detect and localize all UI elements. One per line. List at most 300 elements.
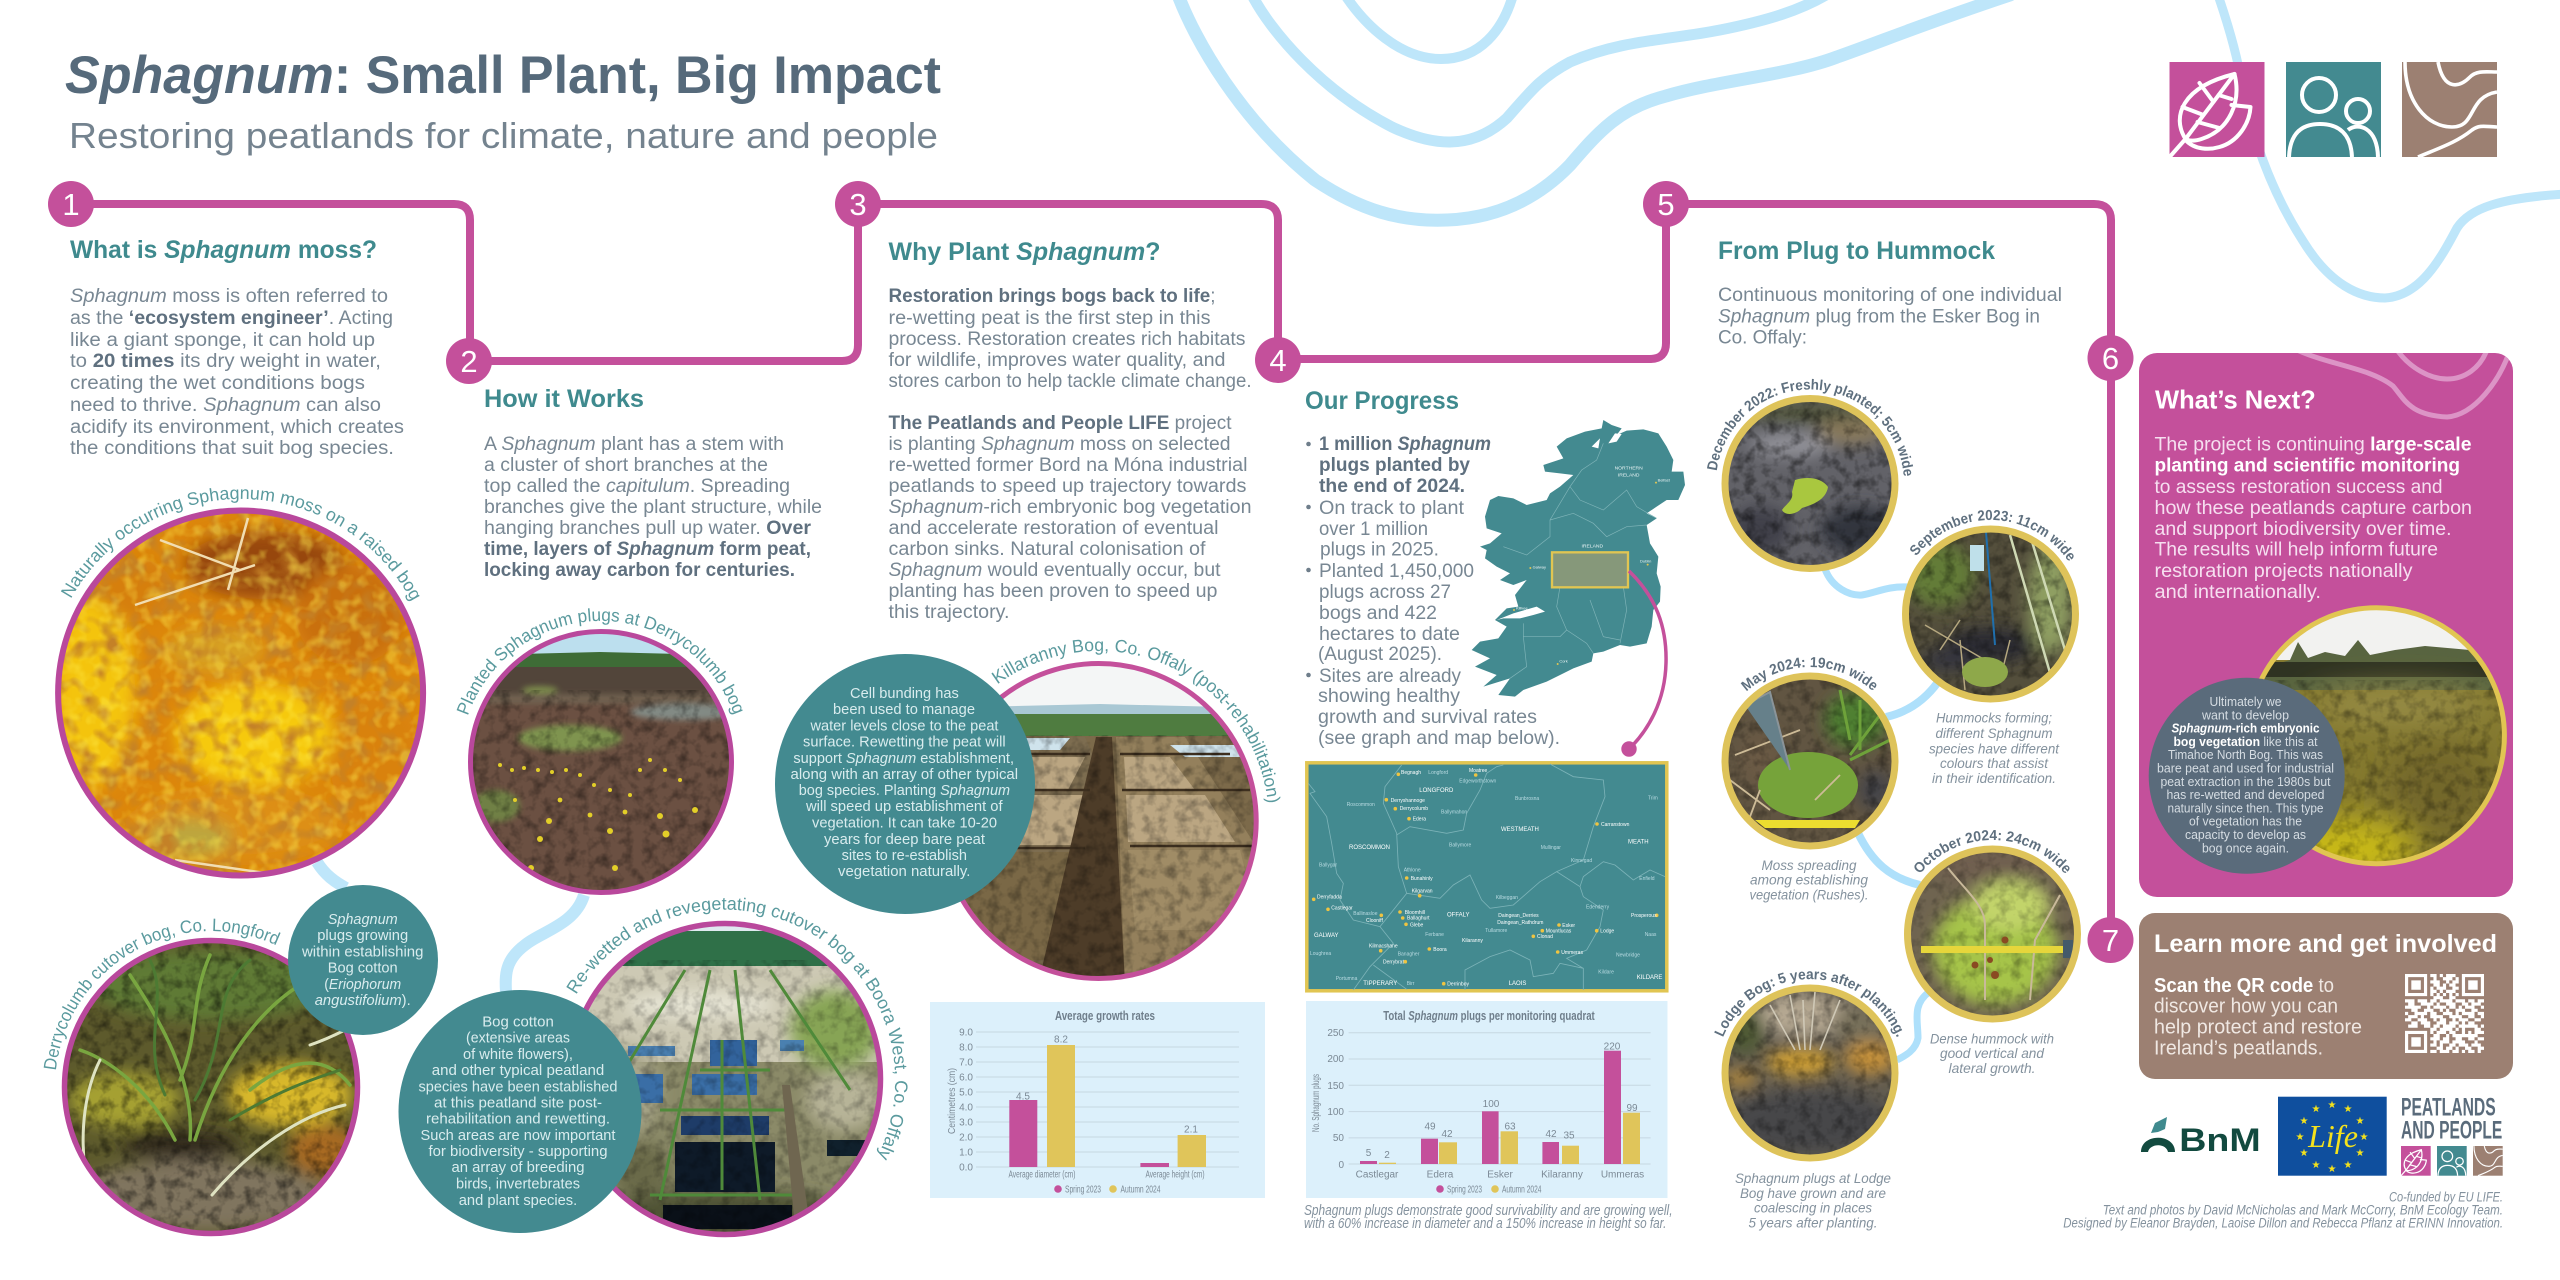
chart: total Sphagnum plugs per quadrat: Esker: [1487, 1170, 1513, 1180]
callout bubble: Timahoe: has re-wetted and developed: [2166, 787, 2324, 802]
site labels: Edera: [1413, 816, 1426, 822]
callout bubble: Timahoe: capacity to develop as: [2185, 827, 2306, 842]
logo: EU LIFE: [2278, 1097, 2387, 1176]
caption: good vertical and: [1940, 1045, 2045, 1061]
callout bubble: bog cotton: and other typical peatland: [432, 1062, 604, 1079]
county labels: GALWAY: [1314, 933, 1339, 939]
bullet list: [1306, 434, 1560, 749]
body text: re-wetted former Bord na Móna industrial: [888, 455, 1248, 476]
map: Ireland overview: IRELAND: [1582, 544, 1604, 550]
heading: Our Progress: [1305, 387, 1459, 415]
icon: people: [2286, 62, 2381, 157]
body text: The results will help inform future: [2154, 539, 2438, 560]
logo: EU LIFE: ★: [2296, 1132, 2305, 1143]
chart caption: Sphagnum plugs demonstrate good survivability and are growing well,: [1304, 1203, 1672, 1219]
value labels: 100: [1483, 1099, 1500, 1110]
callout bubble: bog cotton: birds, invertebrates: [456, 1176, 580, 1193]
site labels: Clooniff: [1366, 918, 1383, 924]
site labels: Derryshannoge: [1391, 798, 1425, 804]
step marker 7: 7: [2102, 923, 2119, 958]
county labels: ROSCOMMON: [1349, 845, 1390, 851]
bullet list: hectares to date: [1319, 624, 1460, 645]
bullet list: Sites are already: [1319, 666, 1461, 687]
caption: [1929, 710, 2060, 786]
town labels: Banagher: [1398, 951, 1420, 957]
callout bubble: cell bunding: water levels close to the peat: [810, 718, 999, 734]
callout bubble: bog cotton: Such areas are now important: [420, 1127, 616, 1144]
callout bubble: bog cotton: of white flowers),: [463, 1046, 573, 1063]
town labels: Ferbane: [1425, 932, 1444, 938]
photo: May 2024: [1722, 657, 1898, 902]
body text: is planting Sphagnum moss on selected: [888, 434, 1230, 455]
body text: planting and scientific monitoring: [2154, 455, 2460, 476]
town labels: Ballinasloe: [1353, 911, 1378, 917]
callout bubble: Timahoe: of vegetation has the: [2189, 814, 2302, 829]
heading: What is Sphagnum moss?: [70, 236, 377, 264]
chart: total Sphagnum plugs per quadrat: 50: [1333, 1133, 1344, 1144]
icon: leaf: [2170, 62, 2264, 157]
town labels: Enfield: [1639, 876, 1655, 882]
heading: Learn more and get involved: [2154, 930, 2497, 958]
legend: Autumn 2024: [1120, 1184, 1161, 1196]
chart caption: with a 60% increase in diameter and a 150% increase in height so far.: [1304, 1216, 1666, 1232]
site labels: Lodge: [1600, 928, 1614, 934]
value labels: 2: [1384, 1150, 1390, 1161]
site labels: Glebe: [1410, 922, 1424, 928]
curved label: December 2022: Freshly planted; 5cm wide: [1707, 378, 1914, 476]
callout bubble: Timahoe: peat extraction in the 1980s but: [2160, 774, 2331, 789]
step marker 1: 1: [62, 187, 80, 222]
body text: the conditions that suit bog species.: [70, 438, 394, 459]
heading: What’s Next?: [2155, 385, 2316, 415]
chart: average growth rates: 2.0: [959, 1132, 973, 1144]
caption: vegetation (Rushes).: [1750, 886, 1868, 902]
map: Ireland overview: Cork: [1559, 659, 1568, 664]
county labels: OFFALY: [1447, 913, 1470, 919]
body text: The project is continuing large-scale: [2154, 435, 2472, 456]
curved label: October 2024: 24cm wide: [1914, 830, 2070, 873]
chart: total Sphagnum plugs per quadrat: Castlegar: [1356, 1170, 1399, 1180]
credits: [2063, 1190, 2503, 1230]
photo: October 2024: [1904, 830, 2081, 1076]
logo: BnM: [2141, 1117, 2261, 1158]
bars: [1009, 1045, 1206, 1167]
body text: Ireland’s peatlands.: [2154, 1038, 2323, 1060]
callout bubble: plugs in bog cotton: angustifolium).: [315, 992, 411, 1009]
heading: How it Works: [484, 385, 644, 413]
callout bubble: plugs in bog cotton: Sphagnum: [328, 911, 398, 928]
site labels: Moatree: [1469, 768, 1488, 774]
value labels: 42: [1441, 1129, 1453, 1140]
connectors between left photos: [317, 862, 584, 992]
map: Ireland overview: Dublin: [1640, 559, 1651, 564]
body text: [2154, 435, 2472, 603]
caption: different Sphagnum: [1936, 725, 2053, 741]
bullet list: the end of 2024.: [1319, 476, 1465, 497]
callout bubble: bog cotton: for biodiversity - supporting: [428, 1143, 608, 1160]
body text: this trajectory.: [888, 602, 1010, 623]
value labels: 5: [1366, 1148, 1372, 1159]
callout bubble: Timahoe: Sphagnum-rich embryonic: [2172, 720, 2320, 736]
logo: EU LIFE: ★: [2300, 1148, 2309, 1159]
body text: locking away carbon for centuries.: [484, 560, 795, 581]
heading: From Plug to Hummock: [1718, 237, 1995, 265]
body text: [2154, 975, 2362, 1060]
logo: EU LIFE: ★: [2344, 1104, 2353, 1115]
icon: land contours: [2402, 62, 2497, 157]
caption: Sphagnum plugs at Lodge: [1735, 1170, 1891, 1186]
site labels: Boora: [1433, 947, 1447, 953]
value labels: [1016, 1034, 1198, 1136]
pink route line connecting numbered steps: [71, 204, 2111, 940]
town labels: Edgeworthstown: [1459, 778, 1496, 784]
callout bubble: bog cotton: rehabilitation and rewetting.: [426, 1111, 610, 1128]
chart: total Sphagnum plugs per quadrat: 250: [1327, 1028, 1344, 1039]
step marker 1: [48, 181, 94, 227]
callout bubble: Timahoe: [2149, 678, 2345, 874]
step marker 3: [835, 181, 881, 227]
site labels: Derrycolumb: [1400, 806, 1428, 812]
value labels: 4.5: [1016, 1092, 1030, 1102]
bullet list: 1 million Sphagnum: [1319, 434, 1491, 455]
value labels: 49: [1424, 1122, 1436, 1132]
map: Ireland overview: Galway: [1533, 565, 1546, 570]
town labels: Birr: [1407, 981, 1415, 987]
logo: EU LIFE: ★: [2360, 1132, 2369, 1143]
bullet list: plugs across 27: [1319, 582, 1451, 603]
bullet list: plugs in 2025.: [1320, 540, 1439, 560]
caption: colours that assist: [1940, 755, 2049, 771]
body text: as the ‘ecosystem engineer’ . Acting: [70, 308, 393, 329]
body text: need to thrive. Sphagnum can also: [70, 395, 381, 416]
chart: total Sphagnum plugs per quadrat: 150: [1327, 1081, 1344, 1092]
body text: Sphagnum moss is often referred to: [70, 286, 388, 307]
town labels: Athlone: [1404, 868, 1421, 874]
site labels: Esker: [1562, 923, 1575, 929]
logo: EU LIFE: Life: [2307, 1118, 2358, 1154]
callout bubble: cell bunding: along with an array of other typical: [791, 766, 1018, 783]
site markers: [1312, 772, 1658, 986]
curved label: May 2024: 19cm wide: [1740, 657, 1876, 691]
section 5: From Plug to Hummock: [1718, 237, 2062, 349]
chart: total Sphagnum plugs per quadrat: 0: [1338, 1160, 1344, 1171]
caption: in their identification.: [1932, 770, 2056, 786]
body text: [888, 286, 1252, 623]
site labels: Mountlucas: [1546, 929, 1572, 935]
chart: average growth rates: [930, 1002, 1265, 1198]
map: Ireland overview: IRELAND: [1618, 472, 1640, 478]
body text: A Sphagnum plant has a stem with: [484, 434, 784, 455]
section 1: What is Sphagnum moss: [70, 236, 404, 459]
curved caption: Killaranny Bog, Co. Offaly (post-rehabilitation): [992, 640, 1280, 802]
step marker 5: 5: [1657, 187, 1675, 222]
county labels: MEATH: [1628, 840, 1649, 846]
callout bubble: bog cotton: Bog cotton: [482, 1013, 554, 1030]
value labels: 63: [1504, 1122, 1516, 1132]
curved caption: Planted Sphagnum plugs at Derrycolumb bog: [456, 608, 743, 715]
town labels: Loughrea: [1310, 951, 1331, 957]
step marker 6: 6: [2102, 341, 2119, 376]
chart: average growth rates: 8.0: [959, 1042, 973, 1054]
callout bubble: Timahoe: bog vegetation like this at: [2174, 734, 2318, 749]
callout bubble: plugs in bog cotton: Bog cotton: [328, 960, 398, 976]
logo: EU LIFE: ★: [2312, 1160, 2321, 1171]
town labels: Longford: [1428, 770, 1448, 776]
body text: top called the capitulum. Spreading: [484, 476, 790, 497]
callout bubble: bog cotton: and plant species.: [459, 1192, 577, 1209]
chart: average growth rates: Average diameter (cm): [1008, 1170, 1076, 1180]
value labels: 220: [1604, 1042, 1621, 1052]
site labels: Bloomhill: [1405, 910, 1425, 916]
caption: species have different: [1929, 740, 2060, 756]
site labels: Castlegar: [1331, 905, 1353, 911]
callout bubble: plugs in bog cotton: plugs growing: [317, 927, 408, 944]
background water contour lines: [1178, 0, 2560, 298]
photo: Derrycolumb cutover bog: [44, 918, 360, 1236]
site labels: Kilaranny: [1462, 938, 1483, 944]
legend: Spring 2023: [1447, 1184, 1482, 1196]
callout bubble: plugs in bog cotton: (Eriophorum: [324, 976, 401, 993]
legend: Autumn 2024: [1502, 1184, 1542, 1196]
body text: Scan the QR code to: [2154, 975, 2334, 997]
QR code: [2405, 976, 2484, 1051]
callout bubble: cell bunding: sites to re-establish: [842, 847, 967, 864]
chart: total Sphagnum plugs per quadrat: Kilaranny: [1541, 1170, 1583, 1180]
bullet list: growth and survival rates: [1318, 707, 1537, 728]
town labels: Newbridge: [1616, 952, 1640, 958]
photo: Lodge Bog 5 years after planting: [1714, 971, 1902, 1231]
town labels: Naas: [1645, 932, 1657, 938]
callout bubble: Timahoe: naturally since then. This type: [2168, 800, 2324, 816]
body text: Restoration brings bogs back to life;: [888, 286, 1216, 307]
photo: re-wetted cutover bog at Boora West: [566, 898, 908, 1238]
body text: planting has been proven to speed up: [888, 581, 1218, 602]
pink callout line from map to detail: [1621, 571, 1666, 757]
callout bubble: cell bunding: been used to manage: [833, 701, 975, 718]
bullet list: over 1 million: [1319, 519, 1428, 540]
legend: [1436, 1184, 1542, 1196]
town labels: Ballymore: [1449, 843, 1471, 849]
bullet list: (August 2025).: [1318, 644, 1442, 665]
step marker 7: [2088, 917, 2134, 963]
chart caption: [1304, 1203, 1672, 1232]
bullet list: showing healthy: [1318, 686, 1461, 707]
logo: Peatlands and People: [2401, 1094, 2503, 1176]
callout bubble: plugs in bog cotton: [288, 885, 438, 1035]
body text: Sphagnum plug from the Esker Bog in: [1718, 306, 2040, 328]
site labels: Kilmacshane: [1369, 943, 1398, 949]
callout bubble: cell bunding: vegetation. It can take 10-20: [812, 814, 997, 832]
body text: help protect and restore: [2154, 1017, 2362, 1039]
bars: [1360, 1051, 1621, 1164]
chart: total Sphagnum plugs per quadrat: 100: [1327, 1107, 1344, 1118]
body text: discover how you can: [2154, 996, 2338, 1018]
chart: total Sphagnum plugs per quadrat: Edera: [1427, 1170, 1454, 1180]
callout bubble: Timahoe: want to develop: [2201, 707, 2289, 722]
site labels: Ummeras: [1561, 950, 1583, 956]
body text: creating the wet conditions bogs: [70, 373, 365, 394]
step marker 6: [2088, 335, 2134, 381]
logo: EU LIFE: ★: [2356, 1116, 2365, 1127]
site labels: Derryfadda: [1317, 895, 1342, 901]
body text: to assess restoration success and: [2154, 477, 2442, 498]
bullet list: plugs planted by: [1319, 455, 1470, 476]
body text: peatlands to speed up trajectory towards: [888, 476, 1246, 497]
town labels: Kildare: [1598, 969, 1614, 975]
legend: [1054, 1184, 1161, 1196]
photo: planted plugs at Derrycolumb: [456, 608, 743, 895]
body text: to 20 times its dry weight in water,: [70, 351, 381, 372]
body text: Sphagnum-rich embryonic bog vegetation: [888, 497, 1252, 518]
chart title: Average growth rates: [1055, 1008, 1155, 1023]
callout bubble: bog cotton: species have been established: [418, 1078, 618, 1095]
curved caption: Naturally occurring Sphagnum moss on a raised bog: [60, 488, 420, 602]
section 4: Our Progress: [1305, 387, 1560, 749]
body text: and support biodiversity over time.: [2154, 519, 2452, 540]
town labels: Trim: [1648, 796, 1658, 802]
callout bubble: bog cotton: (extensive areas: [466, 1030, 570, 1047]
panel: Learn more and get involved: [2139, 913, 2513, 1079]
county labels: KILDARE: [1637, 975, 1662, 981]
callout bubble: cell bunding: support Sphagnum establishment,: [793, 750, 1014, 767]
callout bubble: Timahoe: bare peat and used for industrial: [2157, 760, 2334, 776]
title: Sphagnum: Small Plant, Big Impact: [65, 46, 941, 105]
callout bubble: cell bunding: Cell bunding has: [850, 685, 959, 702]
chart: average growth rates: 0.0: [959, 1162, 973, 1174]
site labels: Clonad: [1537, 934, 1553, 940]
credits: Co-funded by EU LIFE.: [2389, 1190, 2503, 1205]
callout bubble: cell bunding: vegetation naturally.: [838, 863, 970, 880]
logo: Peatlands and People: AND PEOPLE: [2401, 1116, 2502, 1144]
site labels: Daingean_Derries: [1498, 913, 1539, 919]
chart: average growth rates: 3.0: [959, 1118, 973, 1128]
site labels: Carranstown: [1601, 822, 1630, 828]
body text: Sphagnum would eventually occur, but: [888, 560, 1221, 581]
step marker 5: [1643, 181, 1689, 227]
chart: average growth rates: 7.0: [959, 1058, 973, 1068]
credits: Text and photos by David McNicholas and Mark McCorry, BnM Ecology Team.: [2103, 1202, 2503, 1217]
value labels: 99: [1626, 1103, 1638, 1114]
callout bubble: cell bunding: years for deep bare peat: [824, 831, 986, 848]
map: Ireland overview: [1472, 420, 1685, 697]
photo: Timahoe North Bog: [2259, 605, 2507, 866]
connectors between hummock photos: [1825, 569, 1938, 1060]
site labels: [1317, 768, 1657, 988]
callout bubble: bog cotton: [398, 990, 642, 1233]
site labels: Begnagh: [1401, 770, 1421, 776]
county labels: LAOIS: [1509, 981, 1526, 987]
caption: Bog have grown and are: [1740, 1185, 1886, 1201]
chart: average growth rates: Centimetres (cm): [947, 1068, 958, 1134]
map: Ireland overview: NORTHERN: [1615, 465, 1643, 471]
logo: BnM: BnM: [2179, 1122, 2261, 1158]
bullet list: On track to plant: [1319, 498, 1465, 519]
photo: naturally occurring Sphagnum moss: [55, 488, 426, 878]
value labels: 42: [1545, 1129, 1557, 1140]
value labels: 2.1: [1184, 1124, 1198, 1136]
body text: carbon sinks. Natural colonisation of: [888, 539, 1206, 560]
callout bubble: Timahoe: Timahoe North Bog. This was: [2168, 747, 2323, 762]
map: Ireland overview: Killkee: [1516, 605, 1529, 610]
curved label: September 2023: 11cm wide: [1910, 510, 2074, 560]
chart: average growth rates: 1.0: [959, 1148, 973, 1158]
town labels: Roscommon: [1347, 802, 1375, 808]
chart: average growth rates: 5.0: [959, 1088, 973, 1098]
town labels: Bunbrosna: [1515, 796, 1539, 802]
chart: total Sphagnum plugs per quadrat: 200: [1327, 1054, 1344, 1065]
photo: Killaranny Bog post-rehabilitation: [960, 640, 1280, 981]
chart: total Sphagnum plugs per quadrat: [1306, 1001, 1668, 1198]
body text: and internationally.: [2154, 582, 2321, 603]
chart: average growth rates: 6.0: [959, 1072, 973, 1084]
callout bubble: Timahoe: bog once again.: [2202, 840, 2289, 856]
body text: process. Restoration creates rich habitats: [888, 329, 1246, 350]
caption: lateral growth.: [1948, 1060, 2036, 1076]
callout bubble: cell bunding: [775, 654, 1035, 914]
body text: Continuous monitoring of one individual: [1718, 285, 2062, 306]
curved label: Lodge Bog: 5 years after planting.: [1714, 971, 1902, 1037]
section 3: Why Plant Sphagnum: [888, 238, 1252, 623]
town labels: Portumna: [1336, 976, 1358, 982]
body text: hanging branches pull up water. Over: [484, 518, 812, 539]
photo: December 2022 freshly planted: [1707, 378, 1914, 572]
caption: among establishing: [1750, 872, 1868, 888]
caption: 5 years after planting.: [1748, 1215, 1878, 1231]
bullet list: bogs and 422: [1319, 603, 1437, 624]
map: Ireland overview: Belfast: [1658, 477, 1671, 482]
body text: like a giant sponge, it can hold up: [70, 330, 375, 351]
body text: acidify its environment, which creates: [70, 417, 404, 438]
callout bubble: bog cotton: an array of breeding: [452, 1159, 584, 1176]
caption: [1930, 1030, 2054, 1076]
county labels: LONGFORD: [1419, 788, 1454, 794]
county labels: WESTMEATH: [1501, 827, 1539, 833]
site labels: Derrybrat: [1383, 959, 1404, 965]
county labels: TIPPERARY: [1363, 981, 1397, 987]
body text: The Peatlands and People LIFE project: [888, 413, 1232, 434]
body text: [484, 434, 822, 581]
curved caption: Derrycolumb cutover bog, Co. Longford: [44, 918, 280, 1070]
site labels: Prosperous: [1631, 913, 1657, 919]
panel: What's Next: [2139, 350, 2513, 897]
legend: Spring 2023: [1065, 1184, 1101, 1196]
town labels: [1310, 770, 1658, 987]
logo: EU LIFE: ★: [2300, 1116, 2309, 1127]
site labels: Daingean_Rathdrum: [1497, 920, 1543, 926]
section 2: How it Works: [484, 385, 822, 581]
site labels: Bunahinly: [1411, 876, 1433, 882]
chart: average growth rates: 9.0: [959, 1028, 973, 1038]
step marker 3: 3: [849, 187, 867, 222]
body text: restoration projects nationally: [2154, 561, 2413, 582]
callout bubble: cell bunding: surface. Rewetting the peat will: [803, 734, 1006, 750]
chart title: Total Sphagnum plugs per monitoring quadrat: [1383, 1008, 1595, 1023]
callout bubble: plugs in bog cotton: within establishing: [301, 943, 423, 960]
subtitle: Restoring peatlands for climate, nature and people: [69, 115, 938, 156]
body text: Co. Offaly:: [1718, 328, 1807, 349]
chart: total Sphagnum plugs per quadrat: No. Sphagnum plugs: [1311, 1074, 1322, 1132]
photo: September 2023: [1902, 510, 2079, 786]
value labels: [1366, 1042, 1638, 1161]
body text: for wildlife, improves water quality, and: [888, 350, 1226, 371]
bullet list: Planted 1,450,000: [1319, 561, 1474, 582]
caption: coalescing in places: [1754, 1200, 1872, 1216]
caption: Hummocks forming;: [1936, 710, 2052, 726]
value labels: 8.2: [1054, 1034, 1068, 1046]
curved caption: Re-wetted and revegetating cutover bog at Boora West, Co. Offaly: [566, 898, 908, 1161]
callout bubble: cell bunding: will speed up establishment of: [805, 798, 1003, 815]
map highlight rectangle: [1552, 552, 1628, 587]
